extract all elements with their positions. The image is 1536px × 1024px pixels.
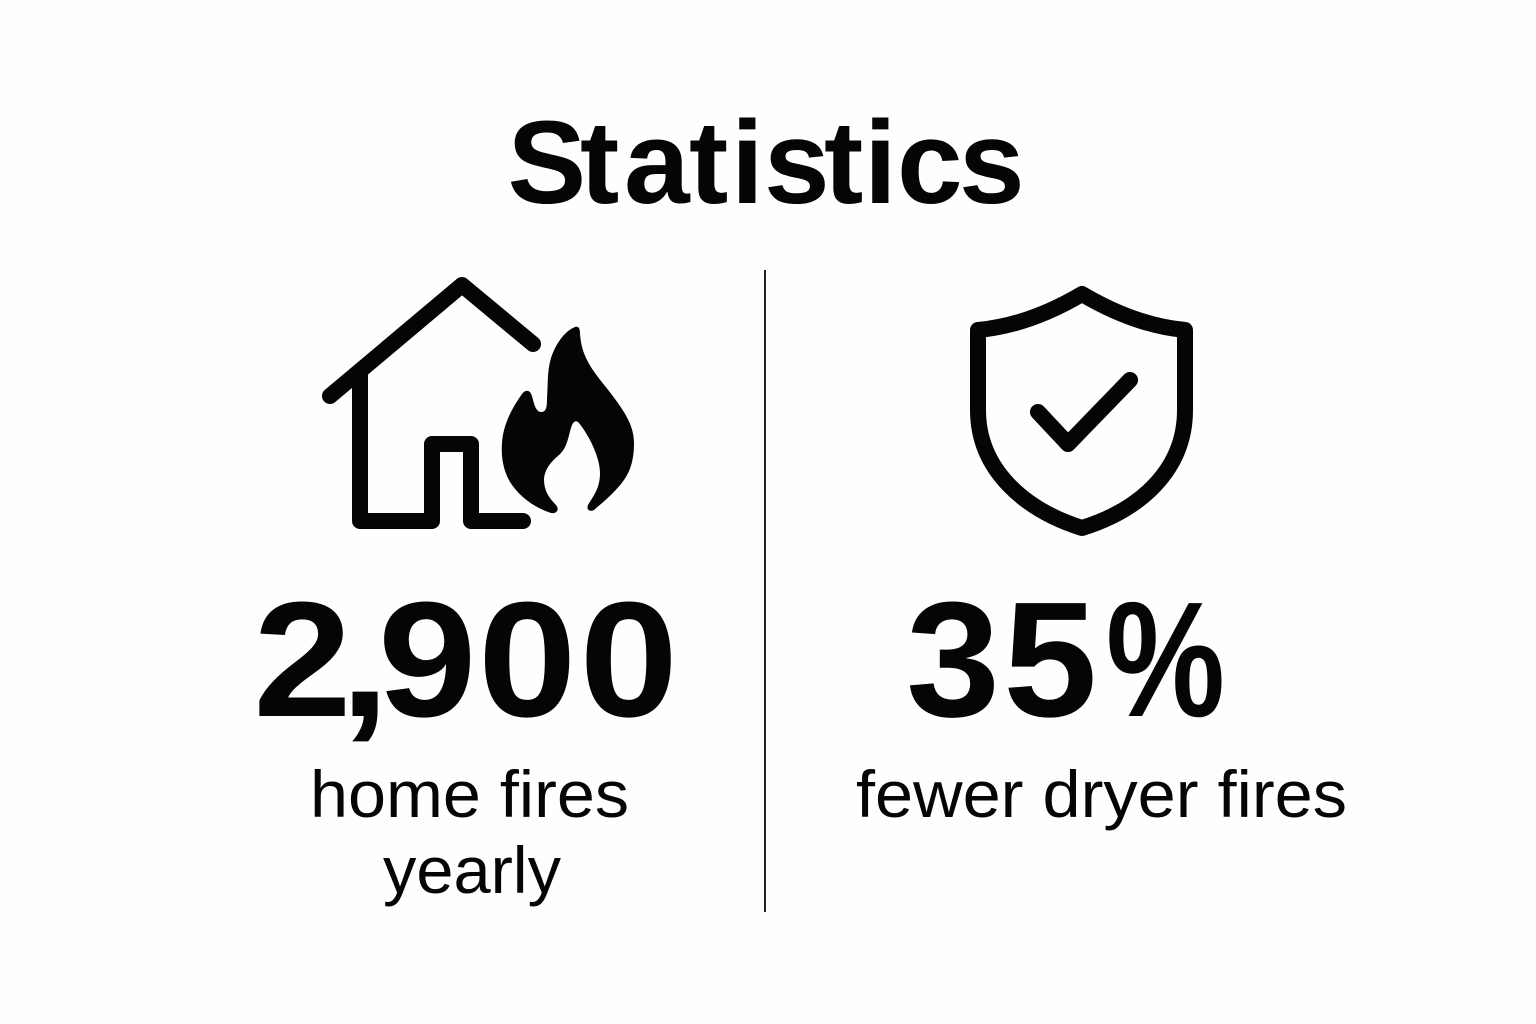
- label: home fires yearly: yearly: [383, 833, 561, 907]
- number: 35%: [906, 568, 1225, 751]
- number: 35%: 35: [906, 568, 1097, 751]
- panel: home fires: [253, 285, 678, 907]
- label: home fires yearly: home fires: [310, 757, 629, 831]
- icon: house with flame: [330, 285, 634, 521]
- flame: [502, 327, 634, 513]
- number: 2,900: 2,900: [253, 568, 678, 752]
- label: fewer dryer fires: fewer dryer fires: [856, 757, 1347, 831]
- title: Statistics: [508, 97, 1025, 229]
- divider: [764, 270, 766, 912]
- house outline: [330, 285, 533, 521]
- panel: fewer dryer fires: [856, 294, 1347, 831]
- label: home fires yearly: [310, 757, 629, 907]
- icon: shield with check: [978, 294, 1185, 528]
- number: 35%: %: [1106, 568, 1225, 751]
